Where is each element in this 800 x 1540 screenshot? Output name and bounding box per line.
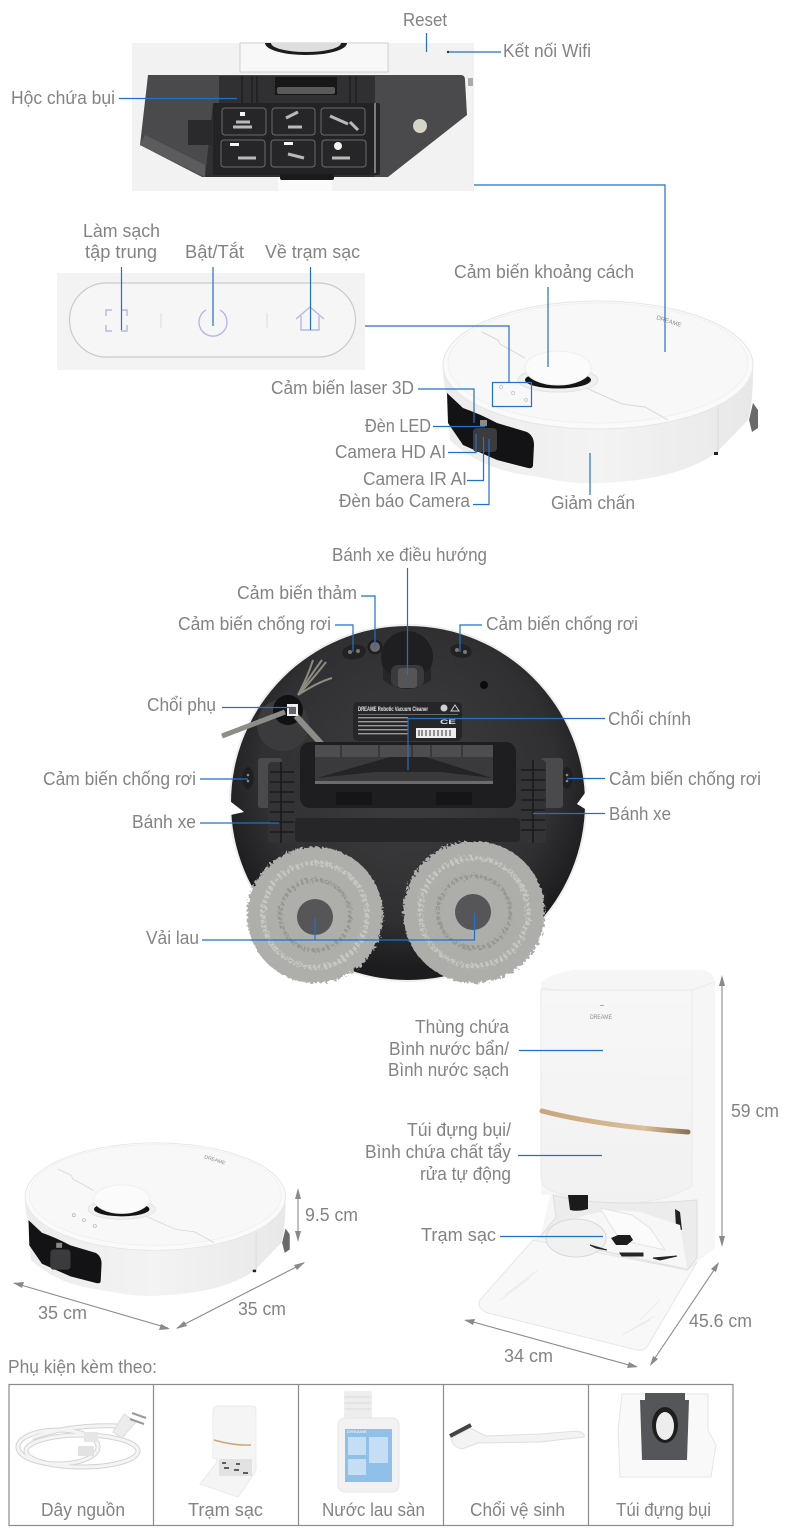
callout: Thùng chứa / Bình nước: Bình nước sạch [388, 1059, 509, 1080]
callout: Cảm biến chống rơi left: Cảm biến chống rơi [43, 768, 196, 789]
caster wheel [381, 631, 433, 689]
callout: Giảm chấn: Giảm chấn [551, 492, 635, 513]
callout: Chổi chính [408, 708, 691, 770]
dimension: station height 59 cm: 59 cm [731, 1100, 779, 1121]
callout: Về trạm sạc: Về trạm sạc [265, 241, 360, 262]
dimension: robot length 35 cm: 35 cm [38, 1302, 87, 1323]
callout: Camera HD AI [335, 434, 476, 462]
callout: Túi đựng bụi / Bình chứa chất tẩy: Bình chứa chất tẩy [365, 1141, 512, 1162]
dimension: station depth 45.6 cm: 45.6 cm [689, 1310, 752, 1331]
callout: Vải lau: Vải lau [146, 927, 199, 948]
side brush [222, 660, 338, 762]
callout: Đèn LED: Đèn LED [365, 415, 431, 436]
label plate: CE [440, 720, 456, 726]
label: Túi đựng bụi: Túi đựng bụi [616, 1499, 711, 1520]
dimension: station width 34 cm: 34 cm [504, 1345, 553, 1366]
callout: Vải lau [146, 913, 474, 948]
callout: Thùng chứa / Bình nước [388, 1016, 603, 1080]
panel: dust bin photo [132, 43, 474, 191]
callout: Reset [403, 9, 447, 52]
robot bottom view [222, 624, 590, 983]
callout: Kết nối Wifi: Kết nối Wifi [503, 40, 591, 61]
label: Dây nguồn: Dây nguồn [41, 1499, 125, 1520]
callout: Bánh xe điều hướng: Bánh xe điều hướng [332, 544, 487, 565]
callout: Cảm biến thảm: Cảm biến thảm [237, 582, 357, 603]
robot perspective view: DREAME [203, 1154, 227, 1167]
callout: Trạm sạc: Trạm sạc [421, 1224, 496, 1245]
callout: Túi đựng bụi / Bình chứa chất tẩy [365, 1119, 602, 1184]
dock opening [540, 1195, 697, 1270]
callout: dust bin connector [474, 185, 665, 352]
mop pads [247, 841, 545, 983]
base station [479, 970, 715, 1350]
item: dust bag [618, 1393, 716, 1477]
callout: Đèn báo Camera: Đèn báo Camera [339, 490, 471, 511]
callout: top button box connector [365, 326, 532, 406]
robot perspective view [25, 1143, 290, 1296]
dimension: robot length 35 cm [13, 1282, 170, 1330]
label plate: DREAME Robotic Vacuum Cleaner [358, 707, 428, 713]
item: charging station [200, 1406, 256, 1497]
main brush [300, 742, 516, 808]
callout: Chổi phụ: Chổi phụ [147, 694, 216, 715]
callout: Làm sạch tập trung: tập trung [85, 241, 157, 262]
dimension: station width 34 cm [464, 1319, 638, 1368]
wheels [258, 758, 563, 843]
callout: Bật/Tắt: Bật/Tắt [185, 241, 244, 262]
callout: Camera IR AI [363, 437, 484, 489]
callout: Cảm biến chống rơi right: Cảm biến chống rơi [609, 768, 761, 789]
item: power cord [18, 1413, 146, 1467]
callout: Làm sạch tập trung: Làm sạch [83, 220, 160, 241]
callout: Cảm biến laser 3D: Cảm biến laser 3D [271, 377, 414, 398]
icon: focus clean [106, 310, 127, 331]
callout: Cảm biến chống rơi top right: Cảm biến chống rơi [486, 613, 638, 634]
callout: Bánh xe right: Bánh xe [609, 803, 671, 824]
item: floor cleaner bottle: DREAME [347, 1429, 367, 1434]
dimension: robot height 9.5 cm: 9.5 cm [305, 1204, 358, 1225]
callout: Giảm chấn [551, 453, 635, 513]
callout: Cảm biến laser 3D [271, 377, 474, 423]
panel: control buttons [57, 273, 365, 370]
callout: Về trạm sạc [265, 241, 360, 330]
dimension: station height 59 cm [719, 975, 779, 1247]
heading: accessories: Phụ kiện kèm theo: [8, 1356, 157, 1377]
label: Chổi vệ sinh: Chổi vệ sinh [470, 1499, 565, 1520]
callout: Camera IR AI: Camera IR AI [363, 468, 467, 489]
callout: Camera HD AI: Camera HD AI [335, 441, 446, 462]
callout: Thùng chứa / Bình nước: Thùng chứa [415, 1016, 510, 1037]
dimension: robot width 35 cm: 35 cm [238, 1298, 286, 1319]
callout: Chổi chính: Chổi chính [608, 708, 691, 729]
dimension: station depth 45.6 cm [650, 1262, 752, 1366]
label: Trạm sạc: Trạm sạc [188, 1499, 263, 1520]
dimension: robot height 9.5 cm [295, 1188, 358, 1242]
callout: Bánh xe right [533, 803, 671, 824]
callout: Cảm biến chống rơi top left: Cảm biến chống rơi [178, 613, 331, 634]
label: Nước lau sàn: Nước lau sàn [322, 1499, 425, 1520]
callout: Làm sạch tập trung [83, 220, 160, 330]
callout: Đèn báo Camera [339, 439, 489, 511]
accessories table [9, 1384, 733, 1526]
callout: Túi đựng bụi / Bình chứa chất tẩy: Túi đựng bụi/ [407, 1119, 512, 1140]
label plate [353, 702, 462, 741]
callout: Cảm biến chống rơi top right [460, 613, 638, 652]
callout: Bánh xe left: Bánh xe [132, 811, 196, 832]
callout: Bật/Tắt [185, 241, 244, 326]
callout: Đèn LED [365, 415, 485, 436]
icon: home [296, 307, 324, 330]
callout: Reset: Reset [403, 9, 447, 30]
callout: Thùng chứa / Bình nước: Bình nước bẩn/ [389, 1038, 510, 1059]
callout: Túi đựng bụi / Bình chứa chất tẩy: rửa tự động [420, 1163, 511, 1184]
robot top view [443, 301, 758, 483]
icon: power [199, 310, 227, 336]
callout: Hộc chứa bụi: Hộc chứa bụi [11, 87, 115, 108]
dimension: robot width 35 cm [176, 1262, 305, 1329]
item: floor cleaner bottle [338, 1391, 399, 1492]
fall sensors [242, 640, 572, 789]
item: cleaning brush [450, 1425, 584, 1449]
callout: Cảm biến khoảng cách: Cảm biến khoảng cách [454, 261, 634, 282]
base station: DREAME [590, 1015, 612, 1021]
callout: Cảm biến chống rơi top left [178, 613, 353, 652]
gold band [542, 1111, 688, 1132]
callout: Cảm biến thảm [237, 582, 375, 648]
robot top view: DREAME [655, 315, 682, 329]
